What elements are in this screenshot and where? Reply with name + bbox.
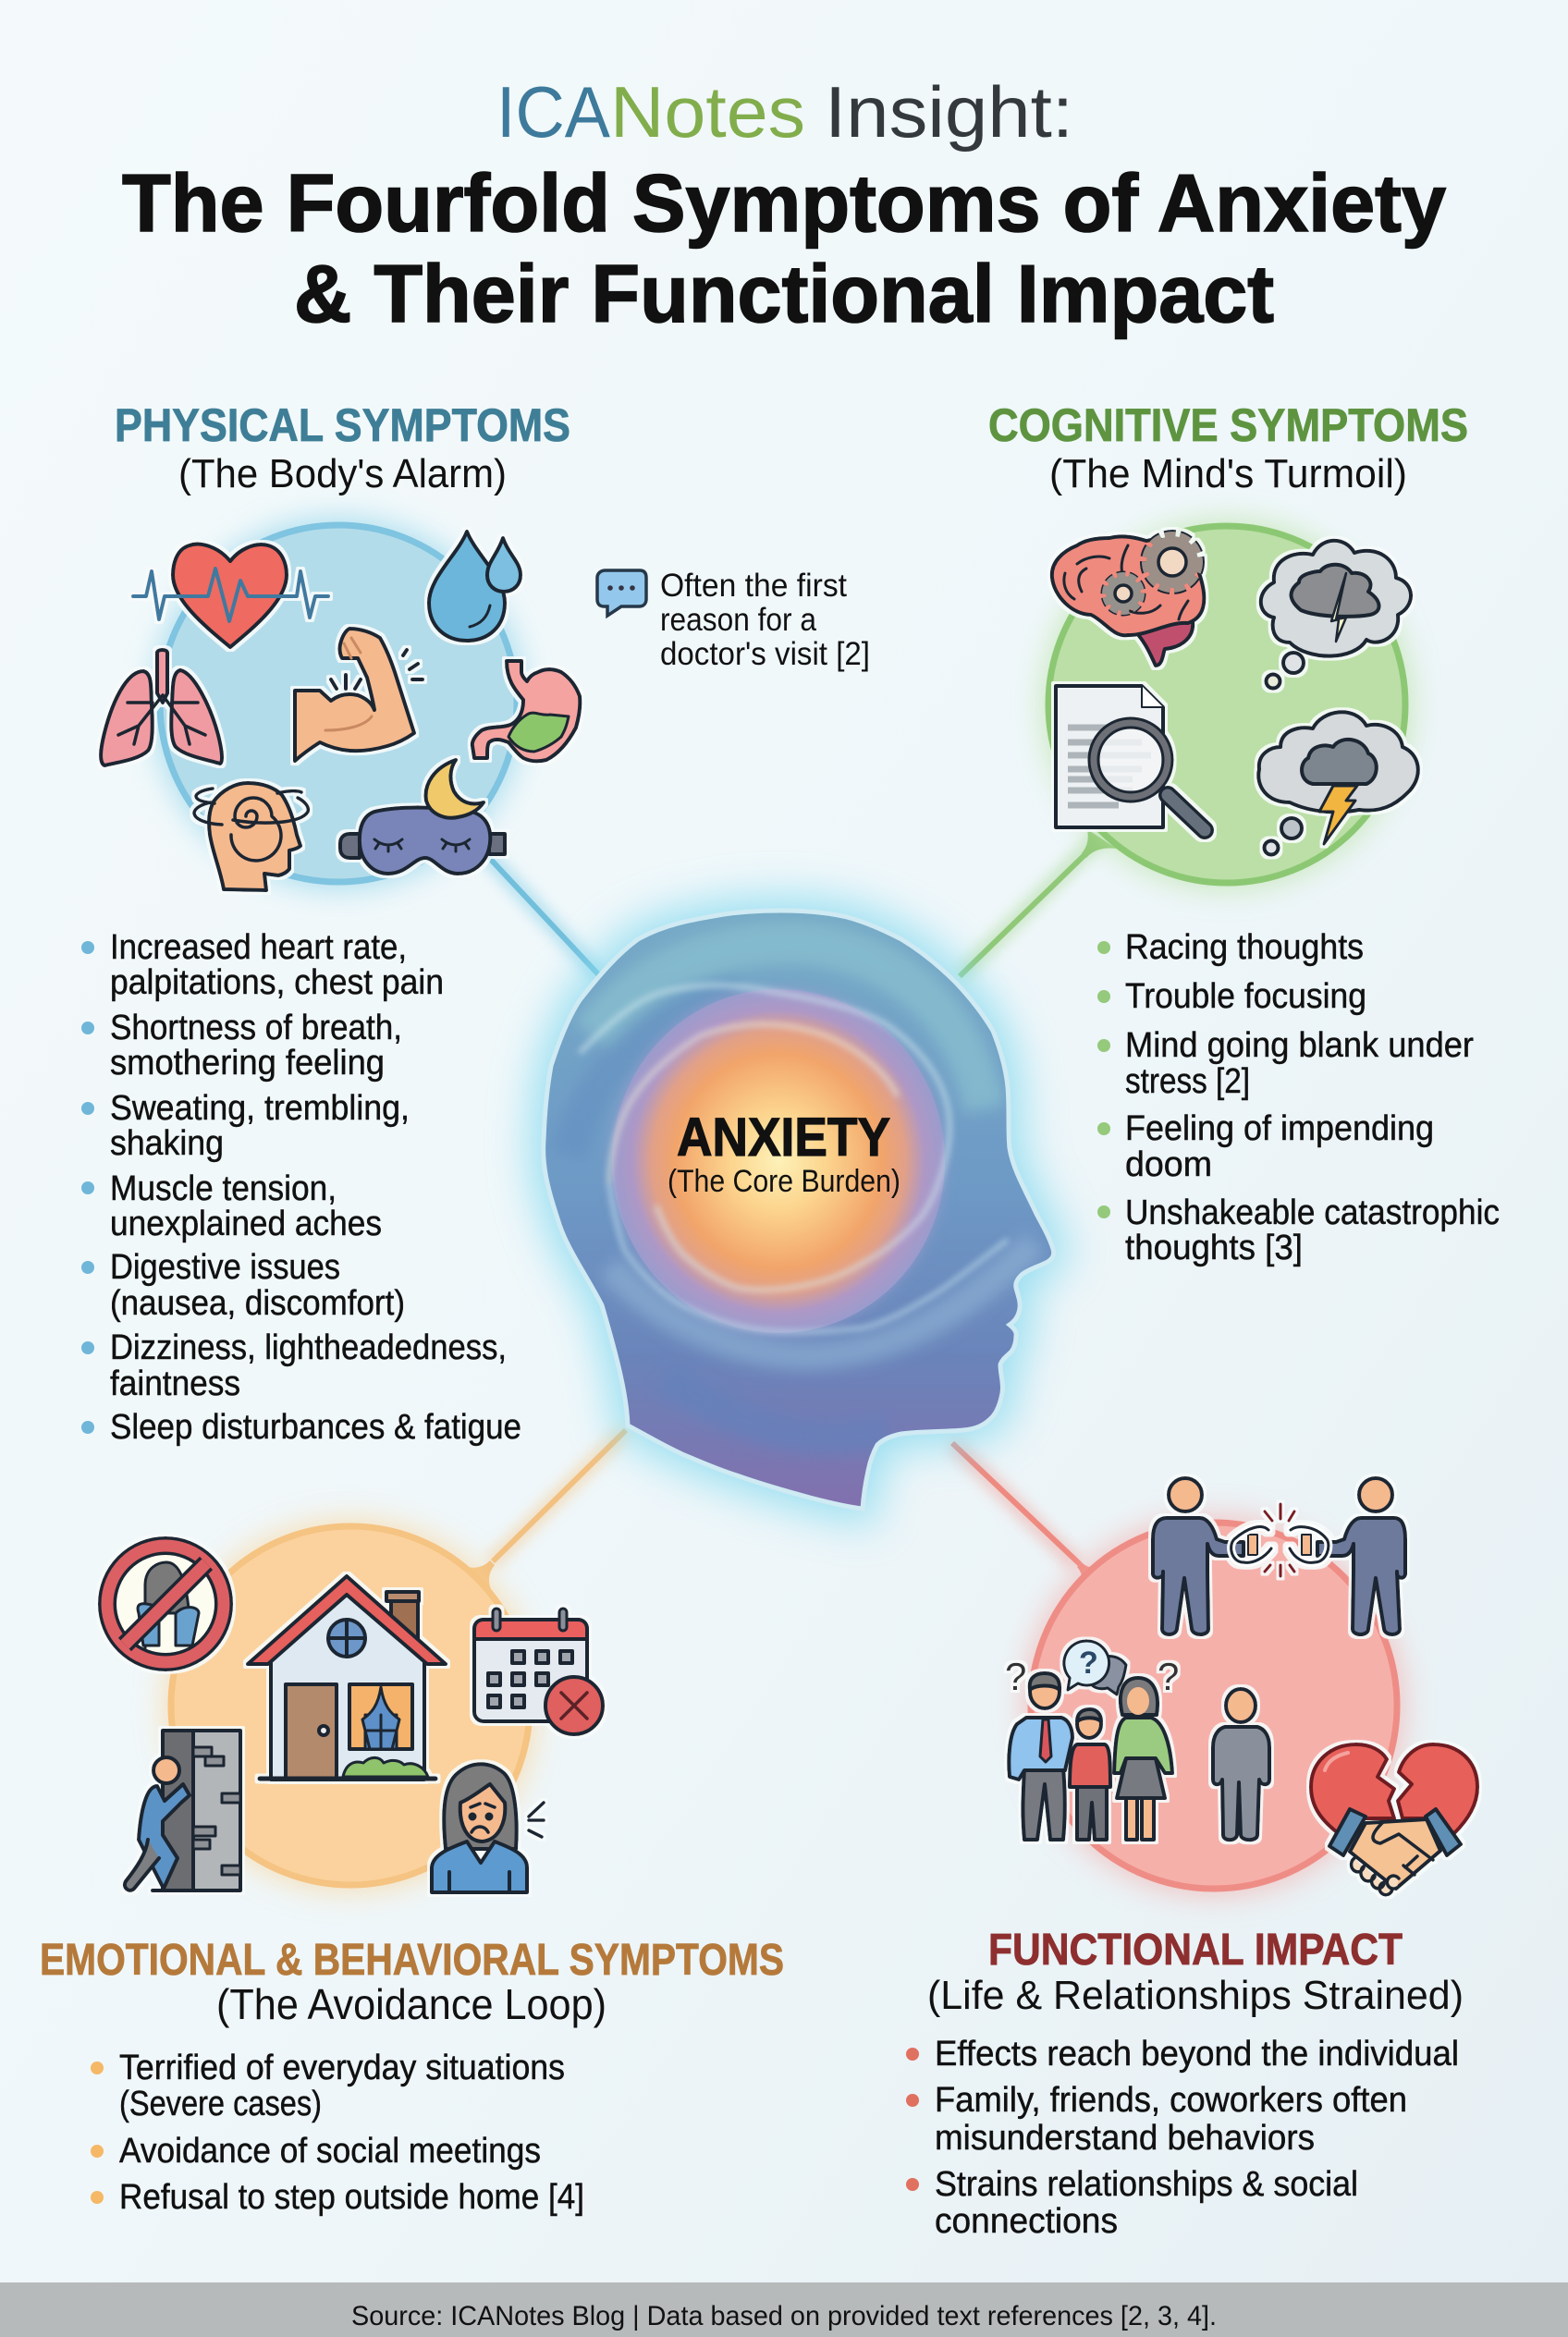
icon: flexed arm: [295, 629, 423, 761]
title: Insight:: [825, 71, 1073, 153]
title: [122, 71, 1446, 339]
physical list: smothering feeling: [110, 1044, 385, 1083]
physical icons: [101, 532, 580, 890]
connectors glow: [467, 832, 1105, 1565]
icon: thought cloud with lightning: [1261, 541, 1411, 688]
functional section: [906, 1478, 1477, 2241]
physical circle: [153, 519, 523, 888]
functional list: misunderstand behaviors: [935, 2119, 1315, 2158]
cognitive list: Racing thoughts: [1125, 928, 1364, 967]
physical list: [81, 928, 521, 1447]
physical section: [81, 399, 870, 1447]
physical list: Sweating, trembling,: [110, 1089, 410, 1128]
functional circle: [1025, 1517, 1403, 1894]
central head: anxiety: [544, 911, 1054, 1509]
functional list: [906, 2035, 1459, 2241]
functional list: Effects reach beyond the individual: [935, 2035, 1459, 2074]
title: Notes: [610, 71, 805, 153]
callout: doctor's visit [2]: [660, 636, 870, 672]
cognitive list: stress [2]: [1125, 1062, 1250, 1101]
functional list: Strains relationships & social: [935, 2165, 1358, 2204]
callout: Often the first: [660, 568, 847, 604]
physical list: unexplained aches: [110, 1205, 382, 1243]
physical list: shaking: [110, 1124, 224, 1163]
physical list: Shortness of breath,: [110, 1009, 402, 1047]
emotional heading: (The Avoidance Loop): [216, 1980, 606, 2028]
cognitive list: Unshakeable catastrophic: [1125, 1193, 1500, 1232]
cognitive list: Feeling of impending: [1125, 1109, 1434, 1148]
connector: physical: [467, 834, 600, 976]
emotional list: Refusal to step outside home [4]: [119, 2178, 584, 2217]
physical heading: [115, 399, 570, 496]
physical heading: PHYSICAL SYMPTOMS: [115, 399, 570, 451]
footer: [0, 2282, 1568, 2337]
functional list: Family, friends, coworkers often: [935, 2081, 1407, 2120]
functional heading: (Life & Relationships Strained): [927, 1973, 1464, 2018]
emotional heading: [40, 1936, 784, 2028]
icon: dizzy head: [194, 783, 308, 890]
physical list: Sleep disturbances & fatigue: [110, 1408, 521, 1447]
cognitive list: doom: [1125, 1145, 1212, 1184]
icon: isolated person: [1213, 1689, 1269, 1840]
functional list: connections: [935, 2202, 1118, 2241]
icon: sleep mask and moon: [340, 760, 505, 874]
physical list: Muscle tension,: [110, 1169, 337, 1208]
cognitive list: thoughts [3]: [1125, 1229, 1303, 1267]
title: ICA: [496, 71, 610, 153]
icon: water drops: [429, 532, 521, 641]
cognitive heading: (The Mind's Turmoil): [1049, 451, 1407, 496]
emotional section: [40, 1521, 784, 2217]
icon: brain with gears: [1052, 536, 1204, 666]
cognitive list: Trouble focusing: [1125, 977, 1366, 1016]
physical list: Increased heart rate,: [110, 928, 407, 967]
icon: confused family: ?: [1158, 1655, 1179, 1698]
icon: stomach: [472, 661, 580, 761]
functional icons: [1005, 1478, 1477, 1895]
cognitive heading: [988, 399, 1468, 496]
physical list: Digestive issues: [110, 1248, 340, 1287]
connector: functional: [952, 1443, 1102, 1594]
cognitive icons: [1052, 536, 1418, 854]
cognitive list: Mind going blank under: [1125, 1026, 1474, 1065]
cognitive circle: [1044, 521, 1410, 887]
footer: Source: ICANotes Blog | Data based on provided text references [2, 3, 4].: [351, 2301, 1217, 2331]
icon: broken heart and handshake: [1311, 1744, 1477, 1895]
icon: confused family: ?: [1005, 1655, 1026, 1698]
emotional circle: [165, 1521, 535, 1890]
title: The Fourfold Symptoms of Anxiety: [122, 157, 1446, 249]
anxiety label: [668, 1107, 900, 1199]
icon: confused family: ?: [1079, 1646, 1098, 1681]
callout: [597, 568, 870, 672]
connector: cognitive: [960, 829, 1117, 976]
emotional heading: EMOTIONAL & BEHAVIORAL SYMPTOMS: [40, 1936, 784, 1985]
title: & Their Functional Impact: [294, 248, 1274, 339]
physical list: (nausea, discomfort): [110, 1284, 405, 1323]
emotional list: Avoidance of social meetings: [119, 2132, 541, 2171]
emotional list: [91, 2049, 584, 2217]
icon: house: [248, 1576, 446, 1780]
icon: two people breaking a chain: [1153, 1478, 1405, 1634]
icon: lungs: [101, 650, 222, 765]
physical list: Dizziness, lightheadedness,: [110, 1328, 507, 1367]
functional heading: [927, 1926, 1464, 2018]
cognitive heading: COGNITIVE SYMPTOMS: [988, 399, 1468, 451]
callout: reason for a: [660, 602, 816, 638]
physical list: palpitations, chest pain: [110, 963, 444, 1002]
icon: heart with pulse: [133, 544, 328, 647]
anxiety label: (The Core Burden): [668, 1164, 900, 1199]
anxiety label: ANXIETY: [677, 1107, 890, 1168]
icon: prohibited cowering figure: [107, 1546, 224, 1662]
cognitive list: [1097, 928, 1500, 1267]
connector: emotional: [467, 1430, 626, 1597]
functional heading: FUNCTIONAL IMPACT: [988, 1926, 1403, 1975]
icon: person hiding behind wall: [125, 1731, 240, 1890]
icon: speech bubble: [597, 570, 646, 616]
cognitive section: [988, 399, 1500, 1267]
emotional list: (Severe cases): [119, 2085, 322, 2123]
icon: confused family: [1005, 1641, 1179, 1840]
icon: document with magnifier: [1056, 686, 1205, 830]
emotional icons: [107, 1546, 603, 1892]
physical heading: (The Body's Alarm): [178, 451, 507, 496]
physical list: faintness: [110, 1364, 240, 1403]
icon: calendar with cross: [474, 1609, 603, 1734]
emotional list: Terrified of everyday situations: [119, 2049, 565, 2087]
icon: worried woman: [432, 1764, 544, 1892]
icon: storm cloud: [1258, 712, 1418, 854]
